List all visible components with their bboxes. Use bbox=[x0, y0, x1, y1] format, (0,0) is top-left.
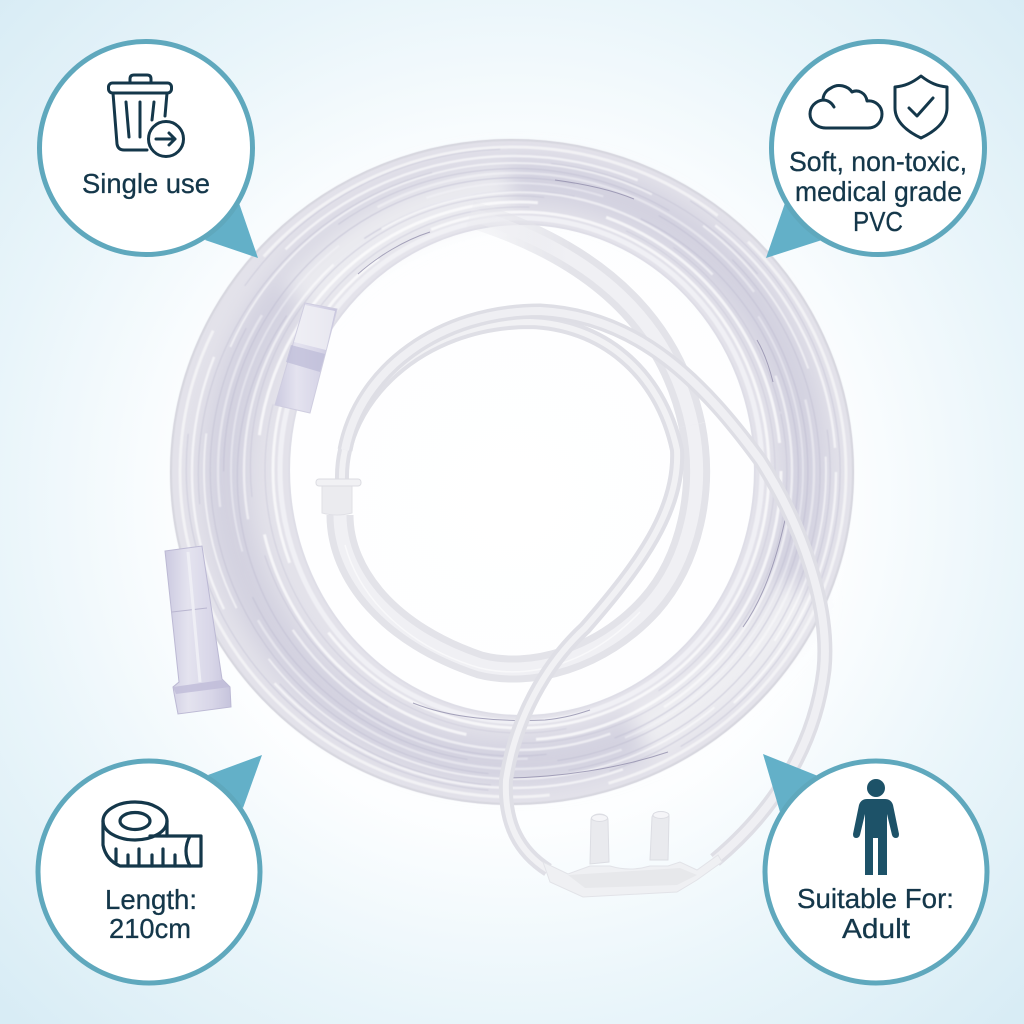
flange connector on inner tube bbox=[316, 479, 361, 515]
thin tube to right of cannula bbox=[345, 311, 825, 860]
label: Adult bbox=[842, 913, 910, 944]
label bbox=[797, 883, 954, 944]
thin tube to left of cannula bbox=[342, 322, 677, 870]
callout: length bbox=[38, 755, 262, 983]
label: medical grade bbox=[795, 176, 962, 207]
icon: tape measure bbox=[103, 802, 201, 866]
upper tube connector bbox=[275, 303, 337, 413]
label bbox=[105, 884, 197, 944]
nasal prongs bbox=[543, 811, 722, 897]
icon: cloud bbox=[810, 85, 882, 128]
label: 210cm bbox=[109, 913, 191, 944]
callout: material bbox=[766, 42, 984, 258]
icon: adult person bbox=[853, 779, 899, 875]
label: Length: bbox=[105, 884, 197, 915]
label: PVC bbox=[853, 206, 903, 237]
callout: suitable for bbox=[763, 754, 987, 983]
inner thick tubing loop bbox=[340, 214, 697, 672]
label: Suitable For: bbox=[797, 883, 954, 914]
callout: single use bbox=[40, 42, 258, 258]
main tubing coil bbox=[141, 95, 891, 848]
label: Soft, non-toxic, bbox=[789, 146, 967, 177]
label bbox=[789, 146, 967, 237]
product: nasal oxygen cannula tubing bbox=[141, 95, 891, 897]
icon: trash can with arrow bbox=[108, 75, 184, 156]
fine dark strand highlights bbox=[358, 180, 785, 778]
icon: shield with check bbox=[895, 76, 947, 138]
label: Single use bbox=[82, 168, 210, 199]
lower tube end connector bbox=[165, 546, 231, 714]
